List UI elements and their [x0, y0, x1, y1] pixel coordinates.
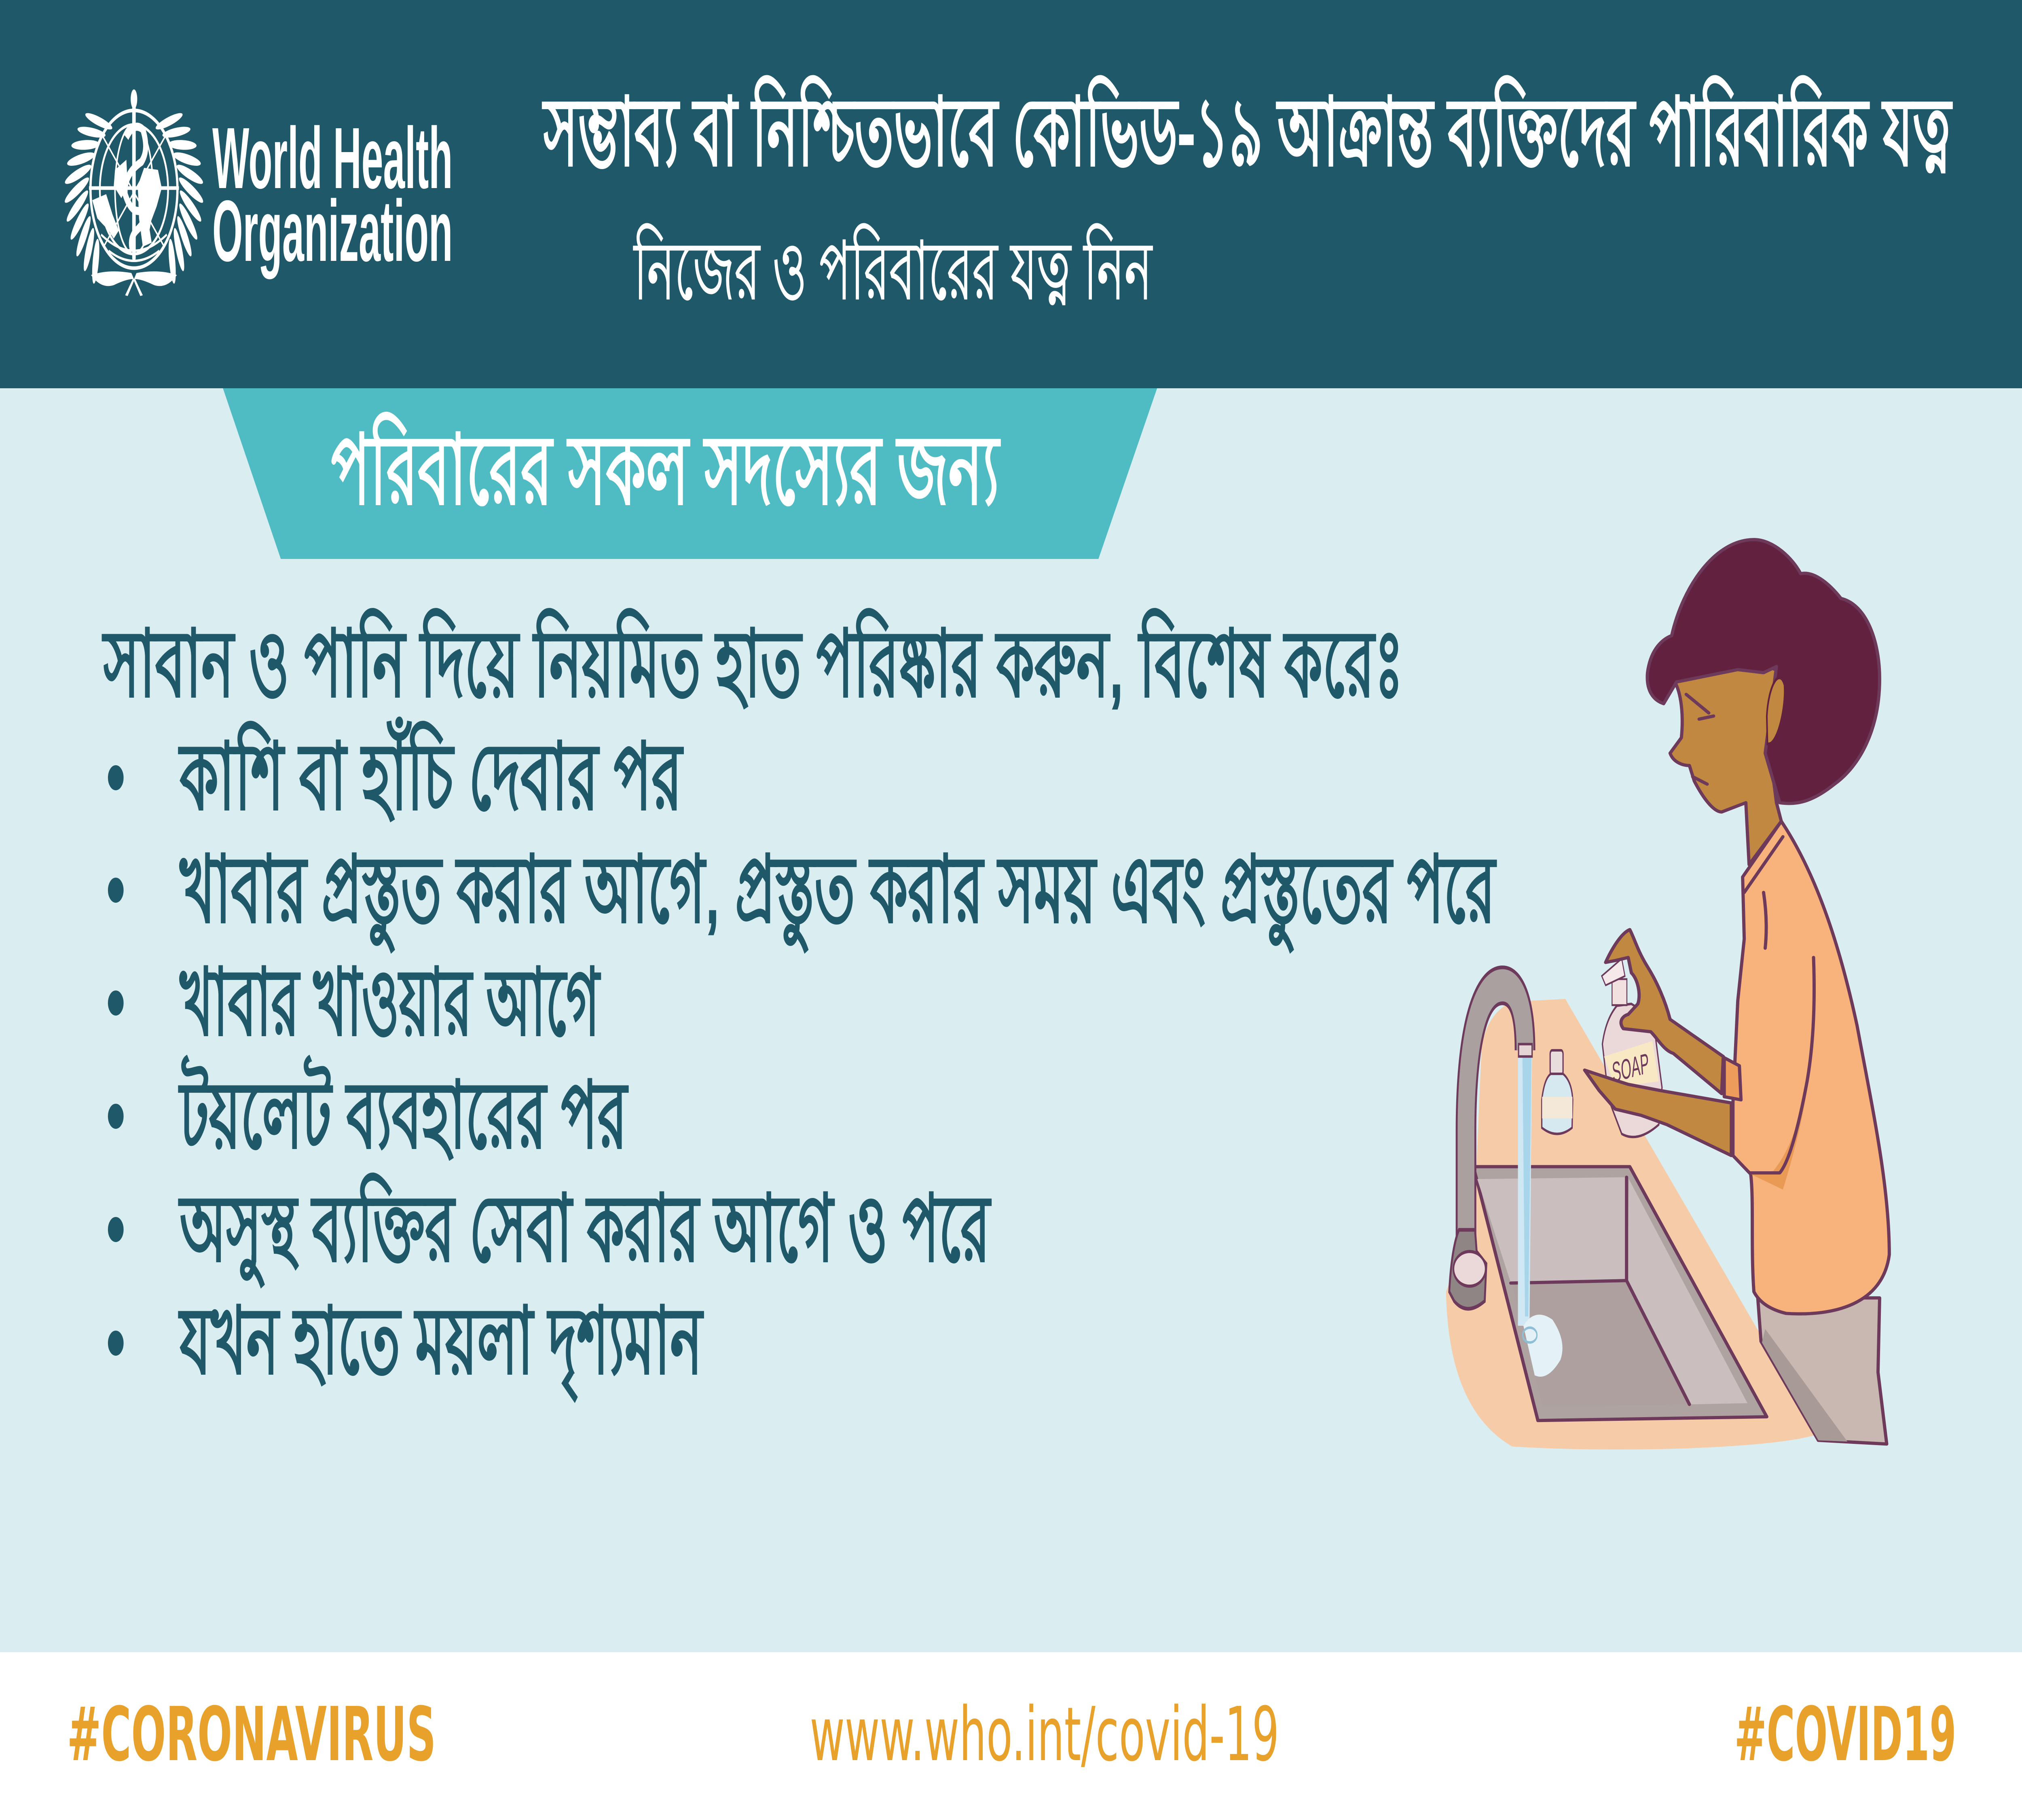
subtitle: নিজের ও পরিবারের যত্ন নিন: [633, 224, 1153, 316]
bullet: visibly dirty hands: যখন হাতে ময়লা দৃশ্যমান: [179, 1289, 703, 1401]
upper arm and hand on pump: [1605, 929, 1723, 1094]
sweater: [1733, 821, 1889, 1314]
logo wordmark: Organization: [212, 182, 453, 279]
cuff: [1724, 1058, 1741, 1100]
footer: [0, 1652, 2022, 1820]
bullet: after toilet: টয়লেট ব্যবহারের পর: [179, 1057, 628, 1167]
running water: [1518, 1044, 1563, 1377]
logo wordmark: [212, 110, 453, 279]
logo wordmark: World Health: [212, 110, 453, 207]
soap dispenser: [1602, 959, 1662, 1137]
header band: [0, 0, 2022, 388]
counter: [1446, 999, 1818, 1450]
eye and mouth: [1686, 694, 1713, 784]
small bottle: [1542, 1050, 1573, 1134]
illustration: woman washing hands at sink: [1446, 540, 1889, 1450]
ear: [1767, 678, 1785, 744]
WHO logo: [63, 89, 453, 296]
bullet: after coughing or sneezing: কাশি বা হাঁচি দেবার পর: [179, 718, 683, 829]
trousers: [1758, 1298, 1887, 1444]
faucet: [1449, 985, 1525, 1309]
sleeve fold: [1744, 837, 1814, 1173]
woman: [1585, 540, 1889, 1444]
bullet: caring for the sick: অসুস্থ ব্যক্তির সেবা করার আগে ও পরে: [179, 1175, 991, 1287]
soap dispenser: SOAP: [1611, 1047, 1650, 1088]
trousers shadow: [1762, 1329, 1847, 1441]
icon: WHO emblem: [63, 89, 205, 296]
hashtag: coronavirus: #CORONAVIRUS: [67, 1692, 436, 1778]
bullet: before eating: খাবার খাওয়ার আগে: [180, 950, 601, 1054]
hand washing instructions: [103, 610, 1496, 1401]
banner heading: পরিবারের সকল সদস্যের জন্য: [331, 413, 1000, 525]
sweater shadow: [1751, 1044, 1813, 1189]
intro line: সাবান ও পানি দিয়ে নিয়মিত হাত পরিষ্কার করুন, বিশেষ করেঃ: [103, 610, 1404, 716]
banner: for all household members: [223, 388, 1157, 559]
hair: [1647, 540, 1880, 804]
website url: www.who.int/covid-19: [810, 1692, 1279, 1778]
lower arm and open hand: [1585, 1070, 1731, 1155]
neck and face: [1670, 654, 1783, 865]
sink: [1473, 1167, 1767, 1420]
bullet: food preparation: খাবার প্রস্তুত করার আগে, প্রস্তুত করার সময় এবং প্রস্তুতের পরে: [180, 837, 1496, 952]
hashtag: covid19: #COVID19: [1734, 1692, 1956, 1778]
